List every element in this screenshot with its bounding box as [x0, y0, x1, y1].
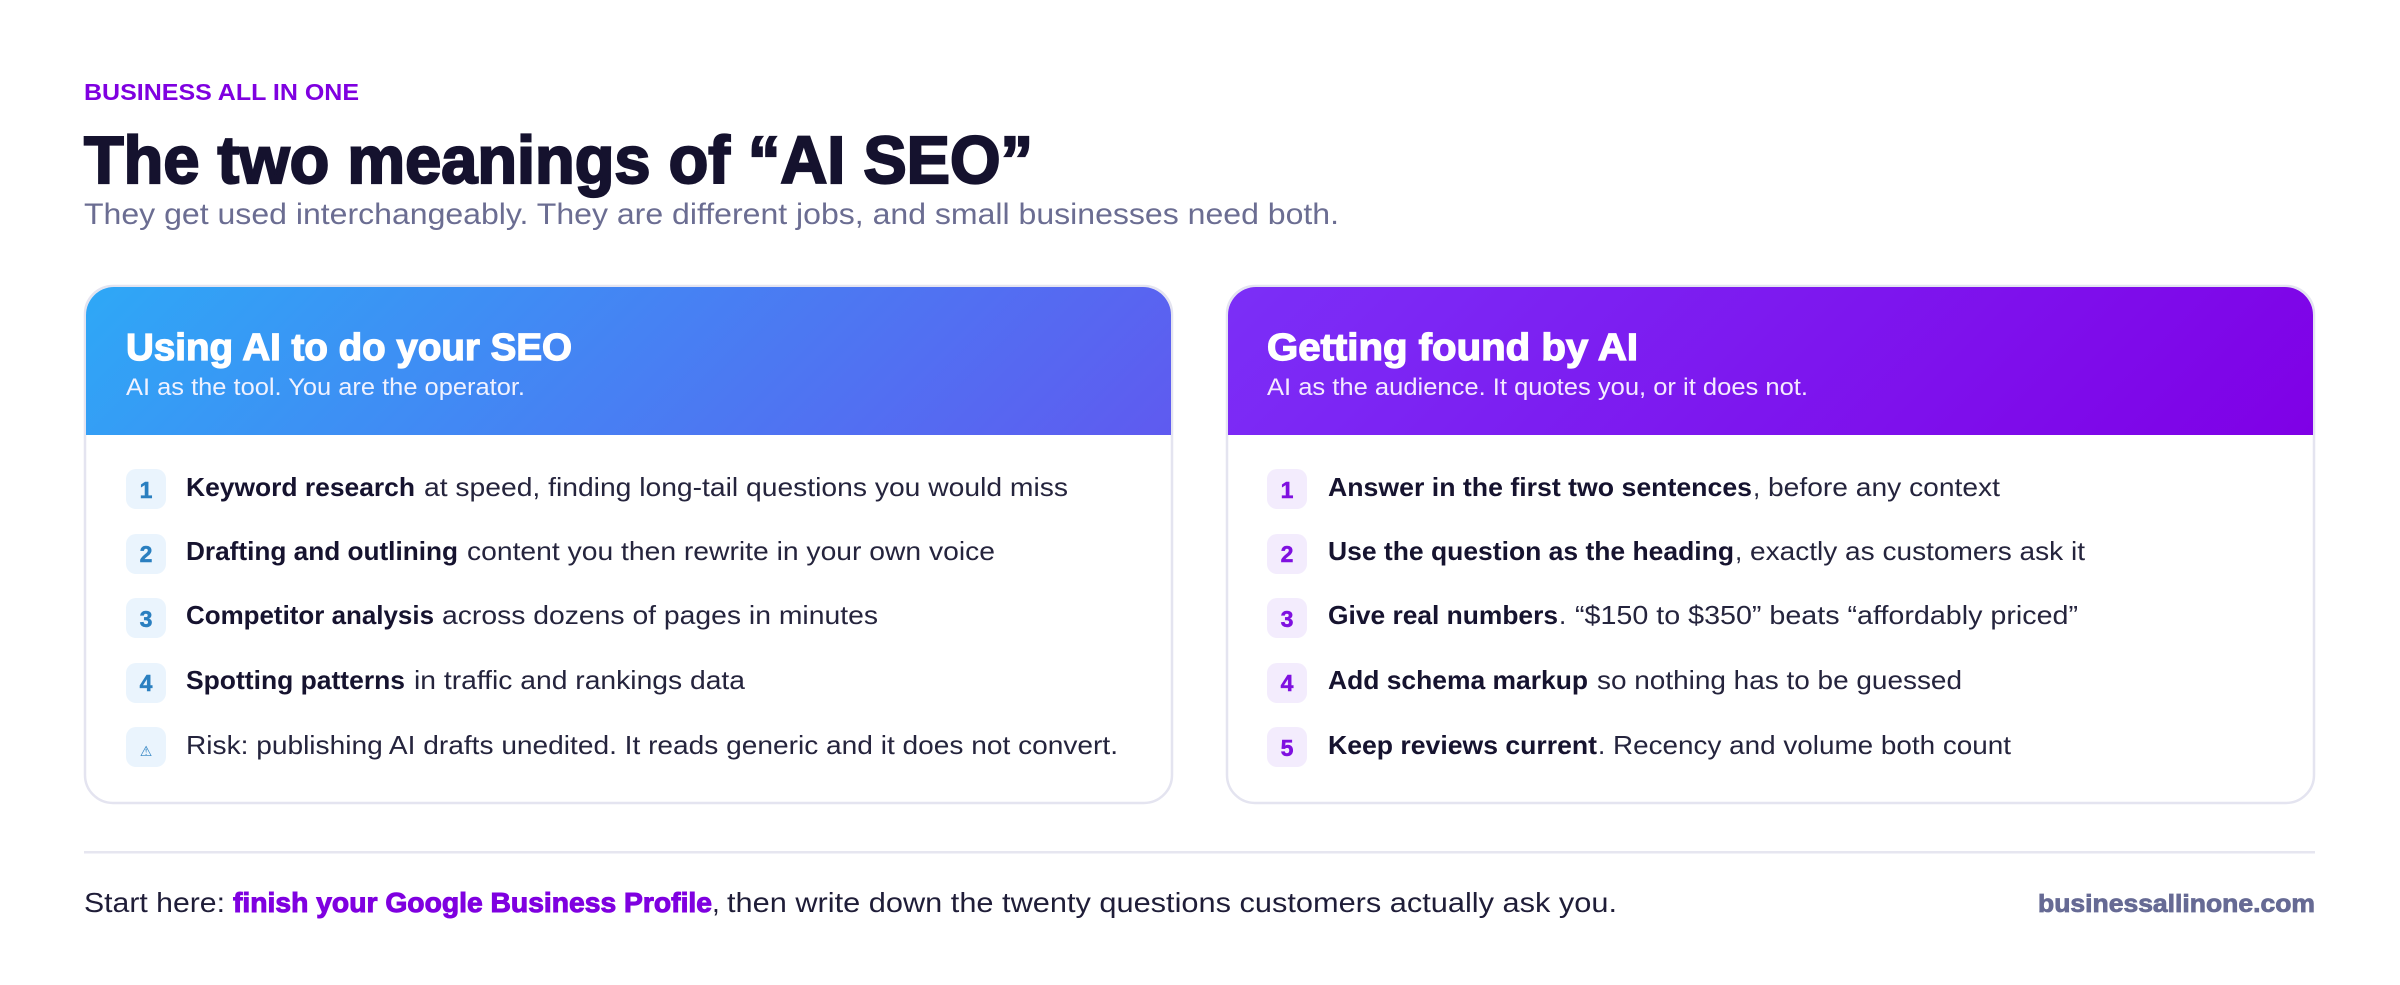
item 1: ,: [1753, 472, 1760, 502]
panel heading: Using AI to do your SEO: [126, 327, 572, 369]
item 2: exactly as customers ask it: [1750, 536, 2086, 566]
item 2: ,: [1735, 536, 1742, 566]
item 3: [1267, 598, 2078, 638]
item 1: [1267, 469, 2001, 509]
item 4: in traffic and rankings data: [414, 665, 746, 695]
item 5: [1267, 727, 2012, 767]
title: The two meanings of “AI SEO”: [84, 123, 1033, 198]
item 2: [126, 534, 995, 574]
card background: [85, 286, 1172, 803]
item 1: [126, 469, 1068, 509]
item 3: “$150 to $350” beats “affordably priced”: [1575, 600, 2078, 630]
item 1: before any context: [1768, 472, 2001, 502]
item 4: Spotting patterns: [186, 665, 405, 695]
item 2: Drafting and outlining: [186, 536, 458, 566]
footer call to action: finish your Google Business Profile: [233, 887, 712, 918]
item 2: Use the question as the heading: [1328, 536, 1734, 566]
item 3: across dozens of pages in minutes: [442, 600, 878, 630]
item 5: .: [1598, 730, 1605, 760]
item 3: 3: [1281, 606, 1293, 632]
eyebrow: BUSINESS ALL IN ONE: [84, 79, 359, 105]
subtitle: They get used interchangeably. They are different jobs, and small businesses need both.: [84, 198, 1339, 231]
item 4: 4: [140, 670, 153, 696]
footer brand url: businessallinone.com: [2038, 890, 2315, 918]
item 2: 2: [1281, 541, 1293, 567]
item 3: Give real numbers: [1328, 600, 1558, 630]
item 1: Answer in the first two sentences: [1328, 472, 1752, 502]
footer call to action: [84, 887, 1617, 918]
item 1: at speed, finding long-tail questions you would miss: [424, 472, 1068, 502]
panel header band: [1228, 287, 2313, 435]
item 4: [1267, 663, 1962, 703]
item 3: .: [1559, 600, 1566, 630]
item 5: risk: ⚠: [140, 744, 152, 760]
item 2: 2: [140, 541, 152, 567]
panel subheading: AI as the audience. It quotes you, or it does not.: [1267, 374, 1808, 401]
panel header band: [86, 287, 1171, 435]
item 5: Keep reviews current: [1328, 730, 1597, 760]
footer call to action: then write down the twenty questions customers actually ask you.: [727, 887, 1617, 918]
item 3: [126, 598, 878, 638]
item 5: Recency and volume both count: [1613, 730, 2012, 760]
item 1: Keyword research: [186, 472, 415, 502]
item 3: 3: [140, 606, 152, 632]
item 5: risk: [126, 727, 1118, 767]
item 2: content you then rewrite in your own voice: [467, 536, 995, 566]
item 3: Competitor analysis: [186, 600, 434, 630]
card background: [1227, 286, 2314, 803]
item 1: 1: [140, 477, 153, 503]
item 4: [126, 663, 746, 703]
item 5: risk: Risk: publishing AI drafts unedited. It reads generic and it does not convert.: [186, 730, 1118, 760]
item 4: Add schema markup: [1328, 665, 1588, 695]
footer call to action: Start here:: [84, 887, 225, 918]
item 2: [1267, 534, 2086, 574]
item 5: 5: [1281, 735, 1294, 761]
panel: getting found by AI: [1227, 286, 2314, 803]
item 1: 1: [1281, 477, 1294, 503]
panel: using AI to do your SEO: [85, 286, 1172, 803]
footer call to action: ,: [712, 887, 720, 918]
item 4: so nothing has to be guessed: [1597, 665, 1962, 695]
item 4: 4: [1281, 670, 1294, 696]
panel heading: Getting found by AI: [1267, 327, 1638, 369]
panel subheading: AI as the tool. You are the operator.: [126, 374, 525, 401]
